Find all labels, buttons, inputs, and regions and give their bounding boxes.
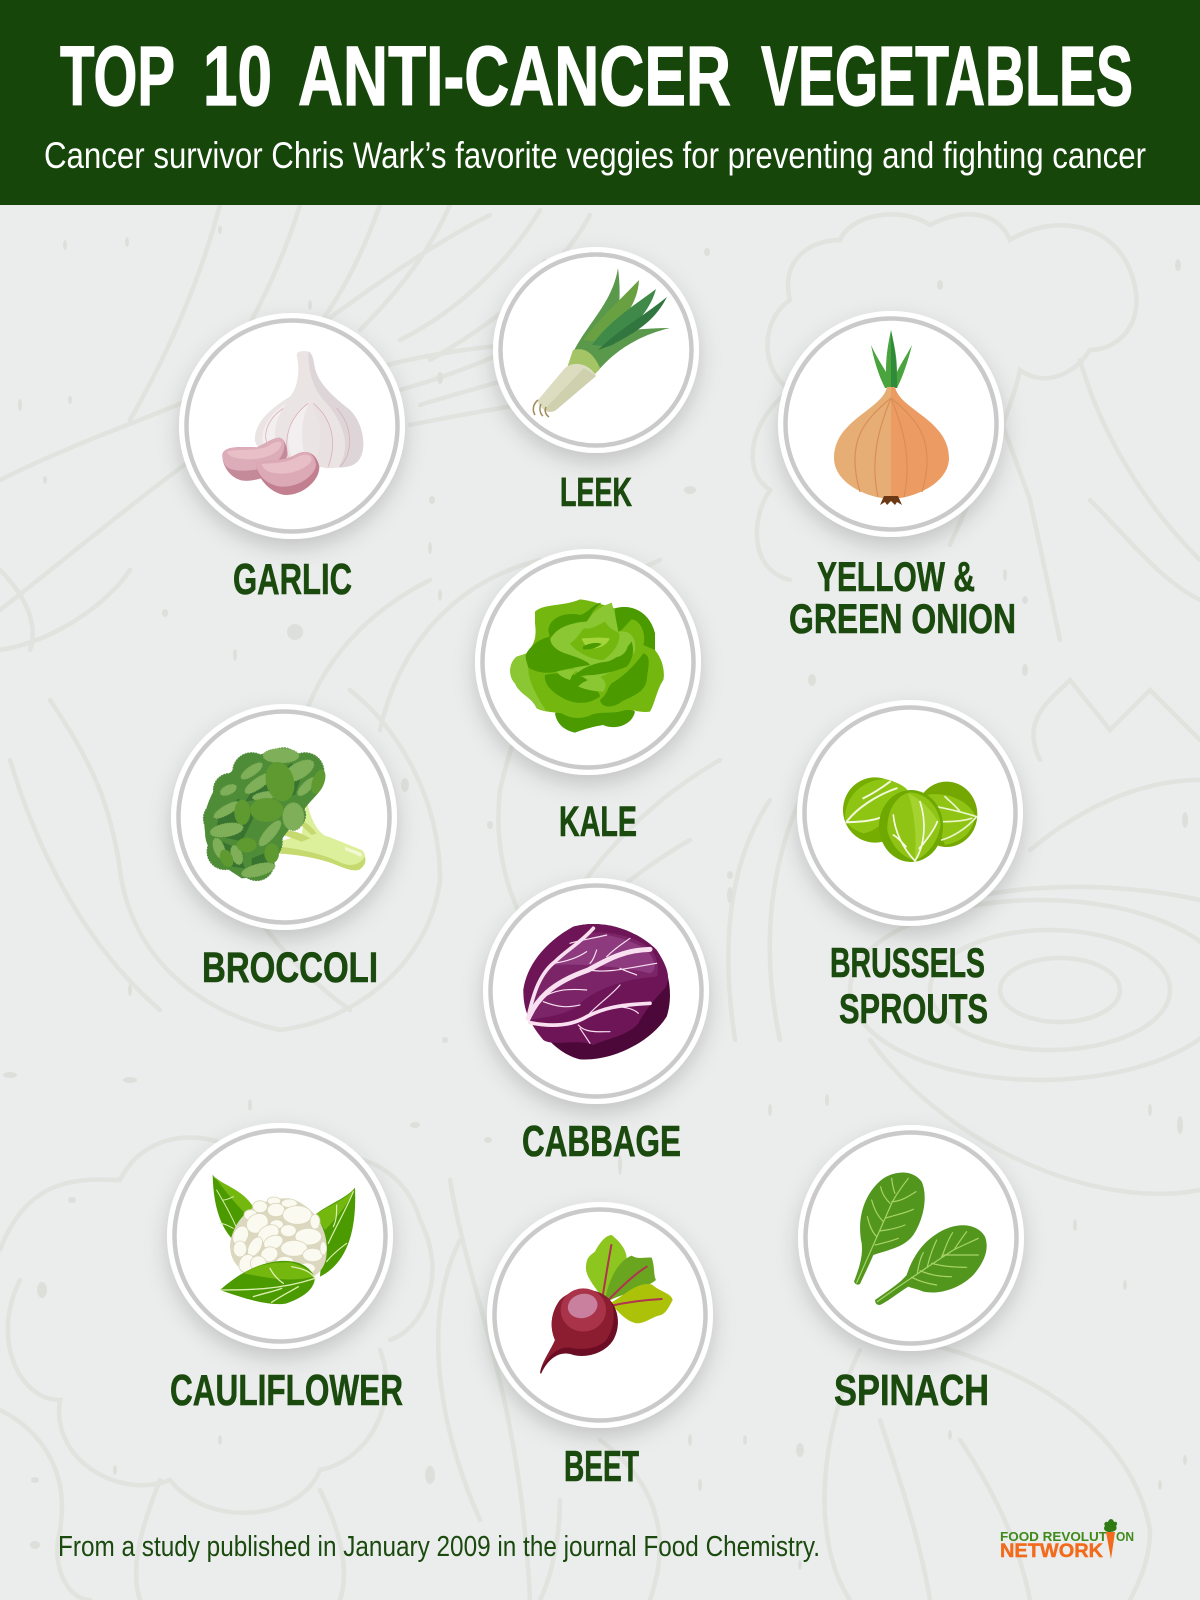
circle: garlic: [179, 313, 405, 539]
icon: spinach: [854, 1172, 987, 1305]
icon: cauliflower: [213, 1174, 355, 1304]
circle: spinach: [798, 1125, 1024, 1351]
circle: leek: [493, 247, 699, 453]
logo: food revolution network: ON: [1116, 1530, 1134, 1544]
icon: carrot: [1104, 1519, 1117, 1559]
title: [60, 29, 1133, 123]
logo: food revolution network: NETWORK: [1000, 1541, 1103, 1562]
label: yellow and green onion: GREEN ONION: [789, 595, 1016, 642]
icon: broccoli: [204, 748, 365, 880]
circle: broccoli: [171, 704, 397, 930]
label: garlic: GARLIC: [233, 555, 352, 604]
label: spinach: SPINACH: [834, 1366, 989, 1415]
icon: garlic: [222, 351, 363, 495]
circle: onion: [778, 311, 1004, 537]
icon: kale: [510, 599, 664, 733]
icon: onion: [834, 330, 949, 505]
label: beet: BEET: [564, 1442, 639, 1491]
title: TOP: [60, 29, 175, 123]
icon: leek: [533, 268, 670, 417]
logo: food revolution network: FOOD REVOLUT: [1000, 1530, 1107, 1544]
label: cabbage: CABBAGE: [522, 1117, 681, 1166]
source note: From a study published in January 2009 in the journal Food Chemistry.: [58, 1531, 820, 1563]
circle: kale: [475, 549, 701, 775]
title: ANTI-CANCER: [298, 29, 731, 123]
label: broccoli: BROCCOLI: [202, 944, 378, 992]
logo: food revolution network: [1000, 1519, 1134, 1562]
label: brussels sprouts: SPROUTS: [839, 985, 988, 1032]
circle: beet: [487, 1202, 713, 1428]
label: leek: LEEK: [560, 469, 632, 515]
circle: cauliflower: [167, 1123, 393, 1349]
header banner: [0, 0, 1200, 205]
circle: cabbage: [483, 878, 709, 1104]
label: cauliflower: CAULIFLOWER: [170, 1366, 403, 1415]
label: brussels sprouts: [830, 939, 988, 1032]
icon: beet: [540, 1235, 673, 1373]
circle: brussels sprouts: [797, 700, 1023, 926]
title: 10: [203, 29, 272, 123]
label: yellow and green onion: YELLOW &: [817, 553, 975, 600]
label: kale: KALE: [559, 798, 637, 846]
icon: cabbage: [523, 924, 670, 1060]
label: yellow and green onion: [789, 553, 1016, 642]
icon: brussels sprouts: [843, 777, 977, 862]
label: brussels sprouts: BRUSSELS: [830, 939, 985, 986]
